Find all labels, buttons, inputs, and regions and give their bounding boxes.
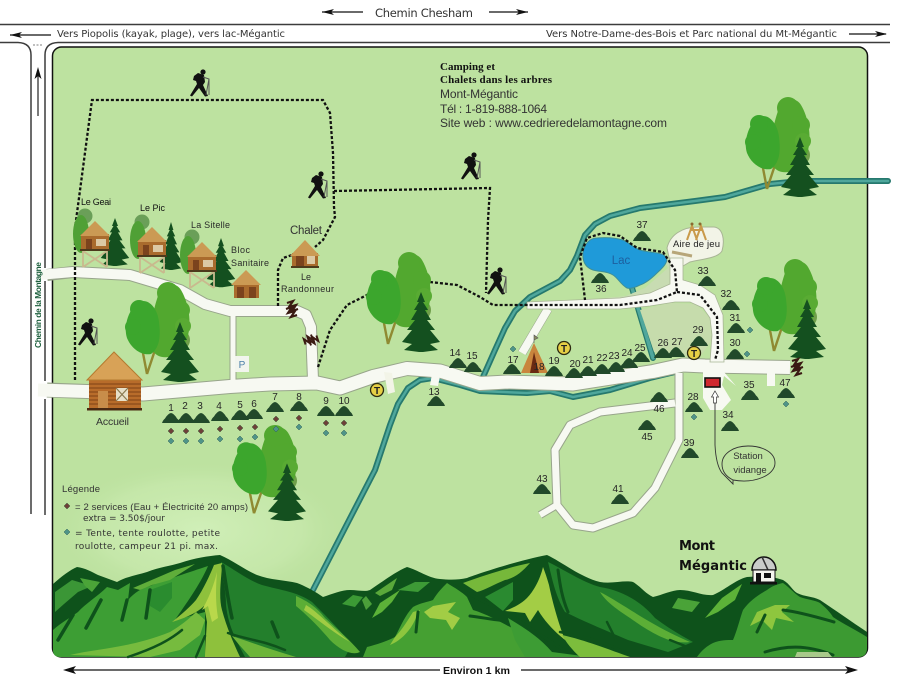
campsites west row: 3 xyxy=(197,401,203,412)
mountains xyxy=(53,555,867,657)
chalet: Le Randonneur xyxy=(281,225,334,294)
campsites west row: 2 xyxy=(182,401,188,412)
campsites west row: 10 xyxy=(338,396,350,407)
campsites west row: 6 xyxy=(251,399,257,410)
playground icon: Aire de jeu xyxy=(672,222,720,256)
reception building: Accueil xyxy=(87,352,142,428)
pale ground around lake xyxy=(583,254,674,306)
campsites east group: 37 xyxy=(636,220,648,231)
campsites west row: 5 xyxy=(237,400,243,411)
scale bar: Environ 1 km xyxy=(63,666,858,677)
tipi: site 18 xyxy=(521,335,548,373)
legend: extra = 3.50$/jour xyxy=(83,514,165,524)
legend: = Tente, tente roulotte, petite xyxy=(75,529,220,539)
callout: Station vidange xyxy=(715,403,775,484)
campsites south group: 46 xyxy=(653,404,665,415)
observatory: Mont Mégantic xyxy=(679,539,777,584)
scale bar: Environ 1 km: Environ 1 km xyxy=(443,666,510,677)
campsites east group: 47 xyxy=(779,378,791,389)
chalet: Le Randonneur: Le xyxy=(301,272,311,282)
campsites south group: 28 xyxy=(687,392,699,403)
campsites central row: 14 xyxy=(449,348,461,359)
campsites south group: 45 xyxy=(641,432,653,443)
hiker icons xyxy=(78,69,506,346)
T markers xyxy=(370,342,700,397)
campsites east group xyxy=(591,220,795,407)
contact information: Chalets dans les arbres xyxy=(440,74,553,86)
legend: = 2 services (Eau + Électricité 20 amps) xyxy=(75,502,248,513)
contact information: Tél : 1-819-888-1064 xyxy=(440,102,547,116)
contact information: Camping et xyxy=(440,61,495,73)
tree cluster: right xyxy=(752,259,826,359)
campsites south group: 39 xyxy=(683,438,695,449)
lake: Lac xyxy=(612,255,631,267)
treehouse: La Sitelle xyxy=(180,220,235,288)
treehouse: Le Pic xyxy=(130,203,182,273)
parking sign: P xyxy=(239,360,246,371)
campsites south group: 34 xyxy=(722,410,734,421)
building: Bloc Sanitaire: Sanitaire xyxy=(231,258,269,268)
campsites central row: 26 xyxy=(657,338,669,349)
reception building: Accueil: Accueil xyxy=(96,416,129,428)
campsites central row: 25 xyxy=(634,343,646,354)
campsites central row: 13 xyxy=(428,387,440,398)
campsites south group: 41 xyxy=(612,484,624,495)
arrow: road going north xyxy=(33,45,43,116)
campsites central row: 21 xyxy=(582,355,594,366)
campsites central row: 15 xyxy=(466,351,478,362)
dump station marker xyxy=(705,378,720,403)
vertical road label: Chemin de la Montagne xyxy=(33,262,43,348)
campsites east group: 31 xyxy=(729,313,741,324)
chalet: Le Randonneur: Chalet xyxy=(290,225,323,237)
playground area xyxy=(667,227,723,266)
campsites south group xyxy=(533,392,739,504)
direction label: Vers Piopolis: Vers Piopolis (kayak, plage), vers lac-Mégantic xyxy=(57,28,285,40)
campsites west row: 9 xyxy=(323,396,329,407)
campsites west row: 1 xyxy=(168,403,174,414)
observatory: Mont Mégantic: Mégantic xyxy=(679,559,747,574)
campsites west row xyxy=(162,392,353,444)
campsites east group: 36 xyxy=(595,284,607,295)
top road label: Chemin Chesham xyxy=(322,6,528,20)
building: Bloc Sanitaire: Bloc xyxy=(231,245,250,255)
campsites central row: 27 xyxy=(671,337,683,348)
contact information xyxy=(440,61,667,130)
contact information: Mont-Mégantic xyxy=(440,87,518,101)
campsites west row: 4 xyxy=(216,401,222,412)
roads xyxy=(38,258,790,528)
map panel xyxy=(52,47,868,657)
observatory: Mont Mégantic: Mont xyxy=(679,539,715,554)
parking sign xyxy=(235,356,249,372)
building: Bloc Sanitaire xyxy=(231,245,269,298)
river xyxy=(313,181,888,590)
pale ground by site 29 xyxy=(640,303,712,357)
campsites central row: 20 xyxy=(569,359,581,370)
treehouse: Le Pic: Le Pic xyxy=(140,203,166,213)
outer road lines xyxy=(0,24,890,515)
treehouse: Le Geai: Le Geai xyxy=(81,197,111,207)
legend: Légende xyxy=(62,484,100,495)
callout: Station vidange: Station xyxy=(733,451,763,462)
tree cluster: top right xyxy=(745,97,819,197)
top road label: Chemin Chesham: Chemin Chesham xyxy=(375,6,473,20)
lake xyxy=(583,238,667,288)
campsites central row: 19 xyxy=(548,356,560,367)
campsites east group: 35 xyxy=(743,380,755,391)
direction label: Vers Notre-Dame-des-Bois: Vers Notre-Dame-des-Bois et Parc national du Mt-Mégantic xyxy=(546,28,837,40)
contact information: Site web : www.cedrieredelamontagne.com xyxy=(440,116,667,130)
legend xyxy=(62,484,248,552)
legend: roulotte, campeur 21 pi. max. xyxy=(75,542,218,552)
campsites east group: 30 xyxy=(729,338,741,349)
callout: Station vidange: vidange xyxy=(733,465,767,476)
campsites central row: 22 xyxy=(596,353,608,364)
campsites east group: 33 xyxy=(697,266,709,277)
tree cluster: near reception xyxy=(125,282,199,382)
tree cluster: centre xyxy=(366,252,440,352)
treehouse: Le Geai xyxy=(73,197,129,267)
campsites east group: 32 xyxy=(720,289,732,300)
campsites central row: 17 xyxy=(507,355,519,366)
campsites east group: 29 xyxy=(692,325,704,336)
campsites central row xyxy=(427,337,685,406)
campsites central row: 23 xyxy=(608,351,620,362)
panel light area behind legend xyxy=(54,460,346,600)
chalet: Le Randonneur: Randonneur xyxy=(281,284,334,294)
road barriers xyxy=(286,301,803,375)
treehouse: La Sitelle: La Sitelle xyxy=(191,220,230,230)
hiking trails xyxy=(75,100,718,380)
campsites south group: 43 xyxy=(536,474,548,485)
campsites west row: 7 xyxy=(272,392,278,403)
campsites central row: 24 xyxy=(621,348,633,359)
playground icon: Aire de jeu: Aire de jeu xyxy=(673,239,720,250)
campsites central row: 18 xyxy=(533,362,545,373)
campsites west row: 8 xyxy=(296,392,302,403)
tree cluster: south xyxy=(232,425,306,521)
